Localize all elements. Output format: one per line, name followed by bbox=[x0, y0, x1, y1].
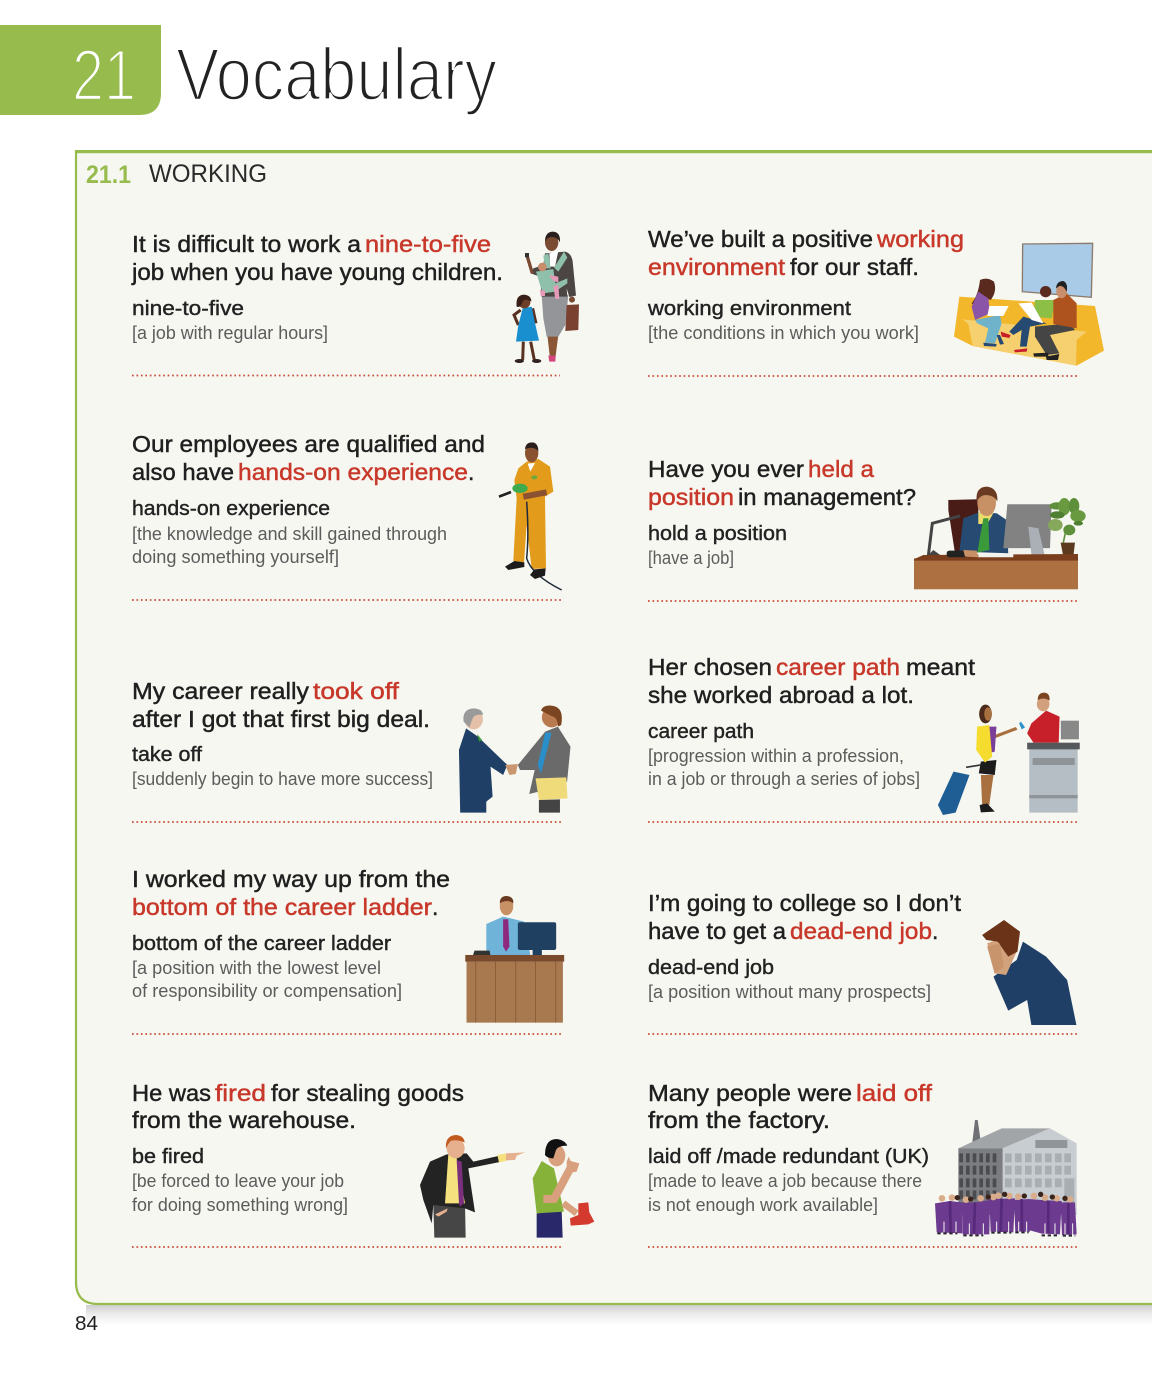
sentence: I worked my way up from the bbox=[132, 866, 450, 892]
definition: [the conditions in which you work] bbox=[648, 322, 919, 343]
sentence: fired bbox=[215, 1080, 266, 1106]
sentence: My career really bbox=[132, 678, 310, 704]
sentence: He was bbox=[132, 1080, 211, 1106]
sentence: . bbox=[432, 894, 438, 920]
sentence: held a bbox=[808, 456, 874, 482]
card: take off bbox=[132, 678, 570, 822]
icon: colleagues on a sofa bbox=[954, 243, 1104, 366]
sentence: It is difficult to work a bbox=[132, 231, 361, 257]
sentence bbox=[648, 654, 976, 708]
definition: of responsibility or compensation] bbox=[132, 980, 402, 1001]
definition: [a position with the lowest level bbox=[132, 957, 381, 978]
sentence bbox=[131, 231, 503, 285]
sentence: laid off bbox=[856, 1080, 933, 1106]
section heading: WORKING bbox=[149, 160, 267, 188]
term: take off bbox=[132, 744, 202, 766]
sentence: hands-on experience bbox=[238, 459, 468, 485]
sentence: We’ve built a positive bbox=[648, 226, 873, 252]
sentence: Have you ever bbox=[648, 456, 804, 482]
chapter number tab bbox=[0, 25, 161, 116]
sentence: working bbox=[876, 226, 964, 252]
section heading: 21.1 bbox=[86, 161, 131, 189]
card: hands-on experience bbox=[132, 431, 562, 600]
sentence: took off bbox=[313, 678, 400, 704]
icon: manager at desk bbox=[914, 487, 1086, 589]
sentence: for our staff. bbox=[790, 254, 919, 280]
definition: [be forced to leave your job bbox=[132, 1170, 344, 1191]
sentence: bottom of the career ladder bbox=[132, 894, 432, 920]
definition: [have a job] bbox=[648, 547, 734, 568]
icon: man at wooden reception desk bbox=[465, 896, 564, 1023]
term: laid off /made redundant (UK) bbox=[648, 1146, 929, 1168]
sentence bbox=[648, 226, 964, 280]
icon: worker in orange overalls with drill bbox=[499, 442, 562, 590]
term: working environment bbox=[647, 298, 851, 320]
sentence: have to get a bbox=[648, 918, 786, 944]
card: nine-to-five bbox=[131, 231, 579, 376]
sentence: position bbox=[648, 484, 734, 510]
icon: boss firing a worker bbox=[420, 1135, 594, 1238]
sentence bbox=[132, 1080, 464, 1133]
definition: [a position without many prospects] bbox=[648, 981, 931, 1002]
sentence bbox=[648, 1080, 933, 1133]
card: laid off bbox=[648, 1080, 1078, 1247]
icon: factory with laid-off workers bbox=[935, 1120, 1077, 1236]
page number: 84 bbox=[75, 1313, 98, 1335]
definition: [progression within a profession, bbox=[648, 745, 904, 766]
card: working environment bbox=[647, 226, 1104, 376]
sentence: also have bbox=[132, 459, 234, 485]
icon: businessmen shaking hands bbox=[459, 706, 570, 813]
sentence: she worked abroad a lot. bbox=[648, 682, 914, 708]
definition bbox=[132, 1170, 348, 1215]
sentence bbox=[648, 456, 916, 510]
term: dead-end job bbox=[648, 957, 774, 979]
term: bottom of the career ladder bbox=[132, 933, 391, 955]
sentence bbox=[132, 866, 450, 920]
chapter number tab: 21 bbox=[72, 36, 136, 116]
definition: is not enough work available] bbox=[648, 1194, 878, 1215]
term: nine-to-five bbox=[132, 298, 244, 320]
card: career path bbox=[648, 654, 1080, 822]
term: career path bbox=[648, 721, 754, 743]
icon: man with head in hands bbox=[982, 920, 1076, 1025]
card: be fired bbox=[132, 1080, 594, 1247]
sentence: . bbox=[932, 918, 938, 944]
sentence bbox=[648, 890, 962, 944]
definition: in a job or through a series of jobs] bbox=[648, 768, 920, 789]
section heading bbox=[86, 160, 267, 189]
icon: working mother with children bbox=[514, 232, 579, 363]
card: dead-end job bbox=[648, 890, 1078, 1034]
sentence: in management? bbox=[738, 484, 916, 510]
title: Vocabulary bbox=[176, 33, 497, 116]
sentence: Her chosen bbox=[648, 654, 772, 680]
term: hold a position bbox=[648, 523, 787, 545]
card: hold a position bbox=[648, 456, 1086, 601]
sentence: . bbox=[468, 459, 474, 485]
sentence: after I got that first big deal. bbox=[132, 706, 430, 732]
definition bbox=[648, 1170, 922, 1215]
sentence: Many people were bbox=[648, 1080, 852, 1106]
sentence: nine-to-five bbox=[365, 231, 491, 257]
definition bbox=[132, 523, 447, 567]
panel: working vocabulary bbox=[75, 150, 1152, 1325]
icon: traveller at reception desk bbox=[938, 693, 1080, 815]
definition: [a job with regular hours] bbox=[132, 322, 328, 343]
definition bbox=[132, 957, 402, 1001]
sentence bbox=[132, 431, 485, 485]
definition bbox=[648, 745, 920, 789]
sentence: dead-end job bbox=[790, 918, 932, 944]
sentence: environment bbox=[648, 254, 786, 280]
sentence: for stealing goods bbox=[271, 1080, 464, 1106]
sentence: career path bbox=[776, 654, 900, 680]
sentence: meant bbox=[906, 654, 976, 680]
sentence: Our employees are qualified and bbox=[132, 431, 485, 457]
sentence: job when you have young children. bbox=[131, 259, 503, 285]
sentence: I’m going to college so I don’t bbox=[648, 890, 962, 916]
term: be fired bbox=[132, 1146, 204, 1168]
sentence: from the warehouse. bbox=[132, 1107, 356, 1133]
sentence bbox=[132, 678, 430, 732]
card: bottom of the career ladder bbox=[132, 866, 564, 1034]
definition: [suddenly begin to have more success] bbox=[132, 768, 433, 789]
term: hands-on experience bbox=[132, 498, 330, 520]
definition: [the knowledge and skill gained through bbox=[132, 523, 447, 544]
definition: [made to leave a job because there bbox=[648, 1170, 922, 1191]
sentence: from the factory. bbox=[648, 1107, 830, 1133]
definition: doing something yourself] bbox=[132, 546, 339, 567]
definition: for doing something wrong] bbox=[132, 1194, 348, 1215]
